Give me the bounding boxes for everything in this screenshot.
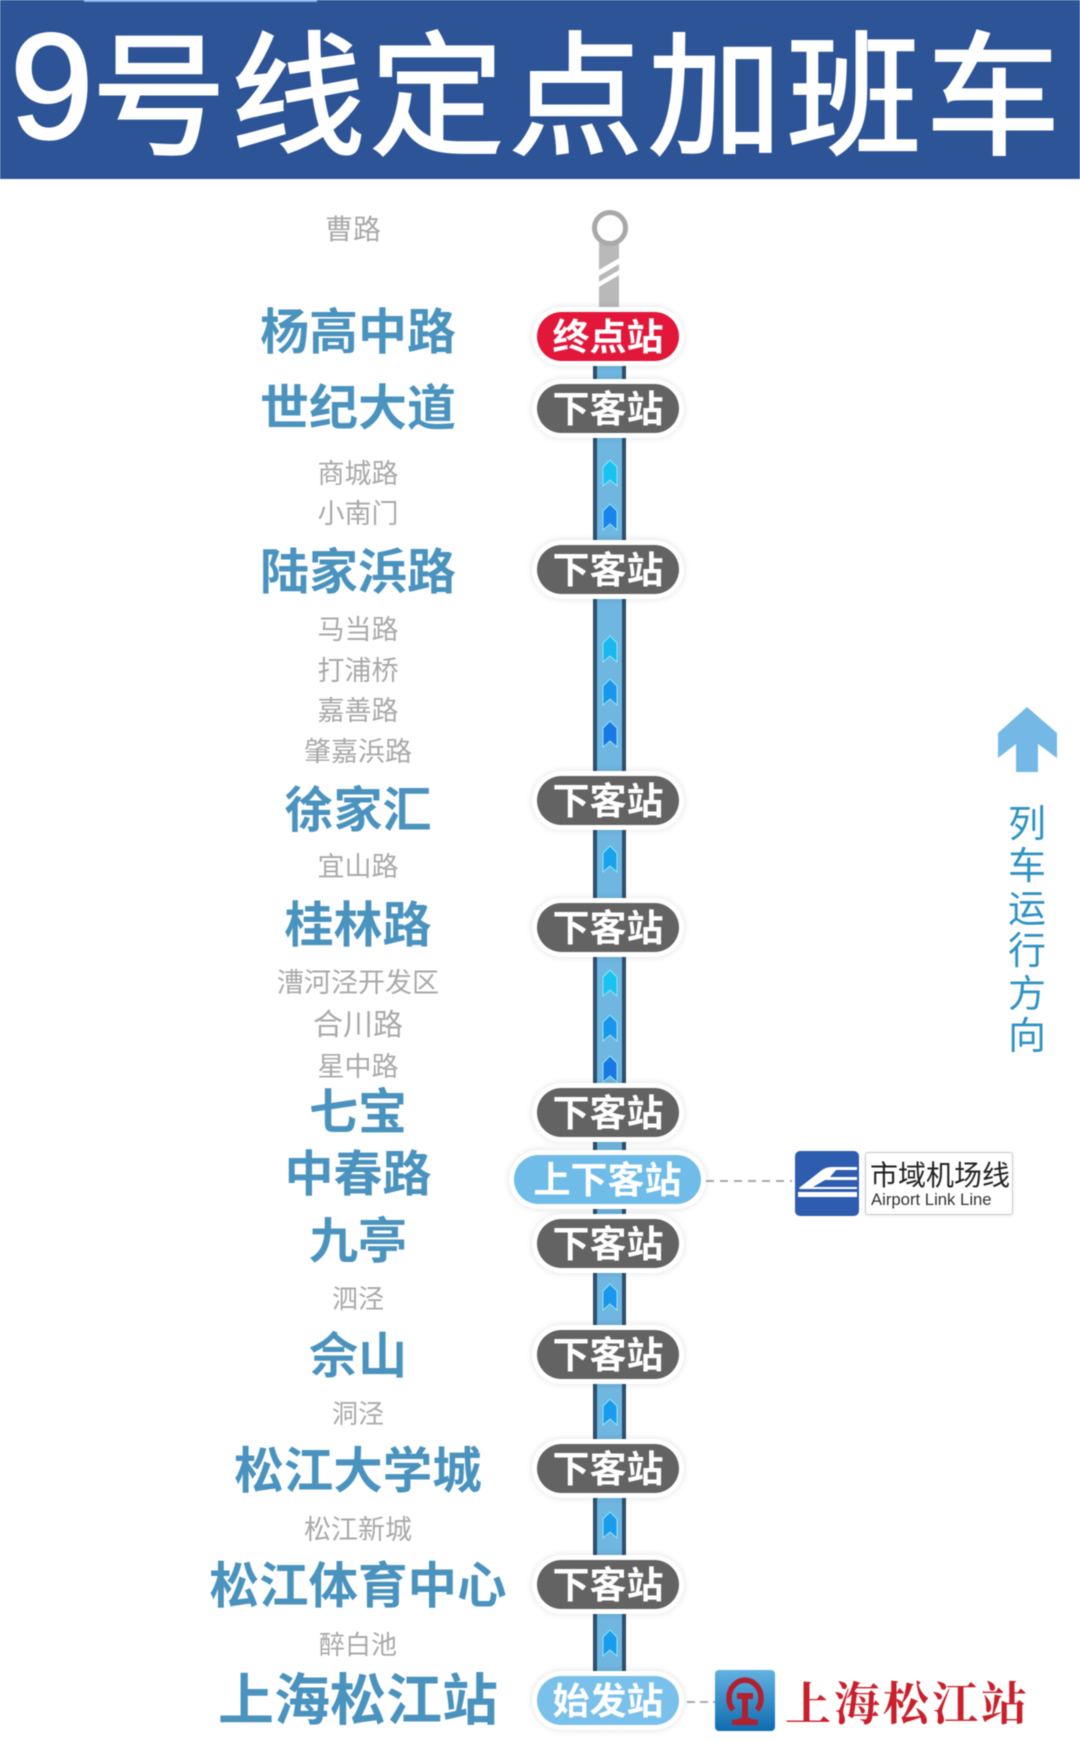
pill: 桂林路下客站 (537, 903, 679, 952)
station: 马当路: 马当路 (318, 615, 398, 645)
dashed connector: railway station (687, 1701, 715, 1703)
station: 徐家汇: 徐家汇 (284, 784, 432, 838)
direction label: 车 (1008, 846, 1046, 888)
station: 星中路: 星中路 (318, 1052, 398, 1082)
station: 洞泾: 洞泾 (332, 1399, 384, 1429)
label: English line name: Airport Link Line (871, 1190, 992, 1209)
station: 七宝: 七宝 (309, 1086, 407, 1140)
station: 醉白池: 醉白池 (319, 1630, 397, 1660)
terminus stub: unserved section to Caolu (594, 212, 626, 312)
direction label: 行 (1008, 931, 1046, 973)
pill: 九亭下客站 (537, 1219, 679, 1268)
station: 中春路: 中春路 (284, 1148, 432, 1202)
pill: 始发站: 始发站 (552, 1681, 664, 1722)
dashed connector: airport link (706, 1180, 792, 1182)
pill: 中春路上下客站 (514, 1155, 701, 1204)
station: 桂林路: 桂林路 (284, 899, 432, 953)
station: 松江体育中心: 松江体育中心 (210, 1559, 506, 1614)
railway station name: 上海松江站 (785, 1679, 1030, 1730)
station: 世纪大道: 世纪大道 (260, 382, 456, 436)
direction label: 运 (1008, 889, 1046, 931)
pill: 桂林路下客站: 下客站 (552, 908, 664, 949)
title banner (0, 0, 1080, 179)
icon: airport link train (795, 1151, 859, 1216)
pill: 徐家汇下客站: 下客站 (552, 781, 664, 822)
station: 漕河泾开发区: 漕河泾开发区 (277, 968, 439, 998)
pill: 始发站 (537, 1676, 679, 1725)
pill: 陆家浜路下客站: 下客站 (552, 550, 664, 591)
title text: 9 (10, 2, 93, 170)
station: 打浦桥: 打浦桥 (318, 656, 398, 686)
pill: 松江大学城下客站 (537, 1444, 679, 1493)
pill: 佘山下客站: 下客站 (552, 1335, 664, 1376)
direction chevrons on track (603, 460, 617, 1656)
pill: 终点站 (537, 312, 679, 361)
station: 松江新城: 松江新城 (304, 1515, 412, 1545)
pill: 陆家浜路下客站 (537, 545, 679, 594)
pill: 世纪大道下客站: 下客站 (552, 389, 664, 430)
pill: 九亭下客站: 下客站 (552, 1224, 664, 1265)
station: 肇嘉浜路: 肇嘉浜路 (304, 737, 412, 767)
pill: 中春路上下客站: 上下客站 (534, 1160, 682, 1201)
airport link label (865, 1152, 1013, 1215)
station: 陆家浜路: 陆家浜路 (260, 546, 456, 600)
pill: 徐家汇下客站 (537, 776, 679, 825)
station: 松江大学城: 松江大学城 (234, 1444, 482, 1499)
station: 嘉善路: 嘉善路 (318, 696, 398, 726)
icon: china railway logo (715, 1670, 775, 1731)
station: 上海松江站: 上海松江站 (218, 1669, 498, 1732)
top edge strip (84, 0, 317, 2)
station: 泗泾: 泗泾 (332, 1284, 384, 1314)
station: 曹路: 曹路 (325, 214, 381, 245)
pill: 七宝下客站 (537, 1088, 679, 1137)
station: 九亭: 九亭 (309, 1215, 407, 1269)
pill: 七宝下客站: 下客站 (552, 1093, 664, 1134)
pill: 佘山下客站 (537, 1330, 679, 1379)
direction label: 向 (1008, 1016, 1046, 1058)
station: 小南门: 小南门 (318, 499, 398, 529)
station: 合川路: 合川路 (313, 1009, 403, 1042)
station: 佘山: 佘山 (309, 1330, 407, 1384)
direction label: 列 (1008, 804, 1046, 846)
line track (593, 355, 626, 1685)
direction arrow (998, 707, 1057, 772)
station: 宜山路: 宜山路 (318, 852, 398, 882)
pill: 松江体育中心下客站 (537, 1560, 679, 1609)
label: Chinese line name: 市域机场线 (870, 1160, 1010, 1191)
direction label: 方 (1008, 974, 1046, 1016)
station: 商城路: 商城路 (318, 459, 398, 489)
pill: 松江大学城下客站: 下客站 (552, 1449, 664, 1490)
station: 杨高中路: 杨高中路 (260, 306, 456, 360)
pill: 松江体育中心下客站: 下客站 (552, 1565, 664, 1606)
direction label (1008, 804, 1046, 1058)
pill: 终点站: 终点站 (552, 317, 664, 358)
pill: 世纪大道下客站 (537, 384, 679, 433)
